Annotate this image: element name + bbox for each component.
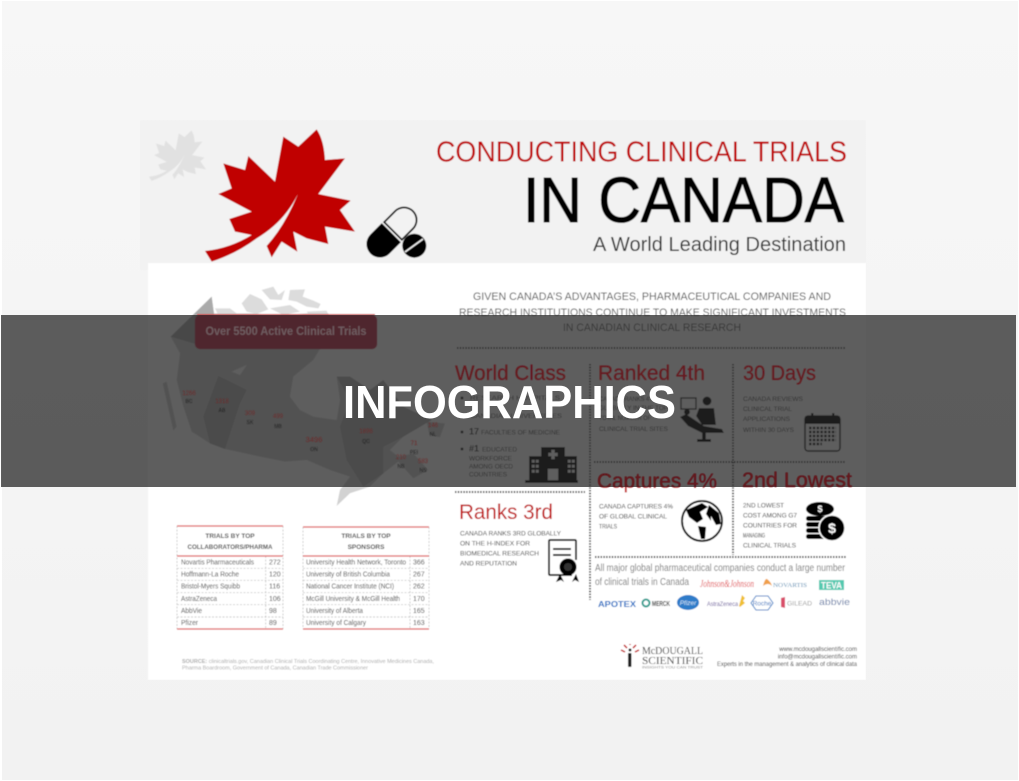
map: Yukon dark area: [171, 297, 217, 347]
heading: Ranked 4th: Ranked 4th: [598, 362, 705, 385]
table: sponsors: SPONSORS: [348, 544, 385, 551]
logo: Novartis: [763, 579, 807, 589]
logo: Roche: [751, 596, 773, 610]
panel: Ranks 3rd: BIOMEDICAL RESEARCH: [460, 550, 539, 558]
map: arctic islands: [215, 287, 328, 316]
table: collaborators: 89: [269, 620, 277, 627]
panel: Ranked 4th: [599, 396, 724, 442]
table: collaborators: 98: [269, 608, 277, 615]
panel: Ranked 4th: TOTAL NUMBER OF: [599, 415, 651, 422]
panel: 30 Days: CANADA REVIEWS: [743, 396, 803, 403]
table: collaborators: AbbVie: [181, 608, 202, 615]
map labels: 146: [428, 423, 439, 429]
intro text: [459, 291, 846, 334]
table: sponsors: 262: [413, 584, 425, 590]
icon: pills: [361, 202, 426, 263]
badge top edge: [197, 314, 375, 316]
headings crossing the band edge: Captures 4%: [597, 470, 717, 493]
logo: Merck: MERCK: [652, 601, 670, 608]
map: Vancouver Island: [163, 382, 177, 431]
contact details: www.mcdougallscientific.com: [778, 647, 857, 653]
map labels: 499: [273, 414, 284, 420]
panel: Captures 4%: [597, 470, 722, 541]
panel: 2nd Lowest: COUNTRIES FOR: [743, 522, 797, 530]
logo: Novartis: NOVARTIS: [773, 582, 807, 589]
panel: Ranked 4th: CANADA RANKS 4TH: [599, 396, 657, 403]
table: sponsors: University Health Network, Toronto: [306, 560, 406, 566]
table: collaborators: Hoffmann-La Roche: [181, 572, 239, 578]
panel: Ranks 3rd: CANADA RANKS 3RD GLOBALLY: [460, 530, 562, 538]
table: sponsors: 170: [413, 596, 425, 603]
panel: Ranked 4th: CLINICAL TRIAL SITES: [599, 426, 668, 433]
panel: Ranks 3rd: ON THE H-INDEX FOR: [460, 540, 530, 548]
table: collaborators: [177, 526, 283, 629]
map labels: PEI: [410, 450, 418, 456]
logo: AstraZeneca: AstraZeneca: [707, 601, 738, 608]
intro text: RESEARCH INSTITUTIONS CONTINUE TO MAKE SIGNIFICANT INVESTMENTS: [459, 307, 846, 319]
panel: 2nd Lowest: CLINICAL TRIALS: [743, 542, 796, 550]
table: sponsors: University of British Columbia: [306, 572, 390, 578]
panel: pharmaceutical companies: All major global pharmaceutical companies conduct a large number: [595, 563, 846, 574]
logo: Teva: TEVA: [821, 580, 842, 590]
panel: Captures 4%: TRIALS: [599, 524, 617, 530]
logo: McDougall Scientific: [621, 644, 704, 670]
map labels: 583: [418, 459, 429, 465]
logo: McDougall Scientific: INSIGHTS YOU CAN TRUST: [642, 666, 704, 670]
overlay band: [1, 315, 1016, 487]
map of Canada: [163, 287, 445, 506]
table: collaborators: Bristol-Myers Squibb: [181, 584, 240, 590]
table: collaborators: 272: [269, 560, 281, 566]
heading: World Class: World Class: [455, 362, 566, 385]
logo: Gilead: [781, 597, 812, 608]
table: collaborators: Novartis Pharmaceuticals: [181, 560, 254, 566]
map labels: AB: [219, 408, 226, 414]
panel: 30 Days: [743, 396, 840, 451]
table: sponsors: 267: [413, 572, 425, 578]
icon: hospital: [525, 447, 578, 483]
logo: AstraZeneca: [707, 595, 745, 608]
map labels: NL: [430, 432, 436, 438]
logo: Roche: Roche: [753, 600, 772, 608]
title: [436, 136, 847, 256]
infographic poster: [140, 120, 866, 680]
panel: pharmaceutical companies: of clinical trials in Canada: [595, 577, 689, 588]
logo: Merck: [642, 600, 670, 608]
source note: SOURCE: clinicaltrials.gov, Canadian Clinical Trials Coordinating Centre, Innovative Medicines Canada,: [182, 659, 434, 665]
panel: World Class: RESEARCH HOSPITALS: [470, 395, 560, 402]
map labels: 210: [396, 455, 407, 461]
contact details: Experts in the management & analytics of clinical data: [717, 662, 858, 668]
title: A World Leading Destination: [593, 234, 846, 256]
intro text: IN CANADIAN CLINICAL RESEARCH: [563, 322, 741, 334]
map: Alberta: [203, 376, 247, 449]
panel: World Class: WORKFORCE: [469, 456, 512, 462]
map labels: 3496: [306, 435, 322, 444]
logo: Pfizer: Pfizer: [680, 600, 697, 607]
heading: 30 Days: 30 Days: [743, 362, 816, 385]
table: sponsors: McGill University & McGill Health: [306, 596, 400, 603]
panel: Captures 4%: CANADA CAPTURES 4%: [599, 504, 673, 510]
map labels: SK: [247, 420, 254, 426]
table: collaborators: AstraZeneca: [181, 596, 217, 603]
map labels: 309: [245, 411, 256, 417]
panel: Captures 4%: OF GLOBAL CLINICAL: [599, 514, 667, 520]
table: sponsors: National Cancer Institute (NCI): [306, 584, 394, 590]
badge: active clinical trials: Over 5500 Active Clinical Trials: [206, 324, 367, 338]
overlay heading: INFOGRAPHICS: [343, 376, 676, 428]
panel: Ranks 3rd: AND REPUTATION: [460, 560, 517, 568]
panel: 2nd Lowest: 2nd Lowest: [742, 469, 852, 492]
panel: Ranks 3rd: Ranks 3rd: [459, 501, 553, 524]
map labels: 1266: [182, 391, 196, 397]
panel: World Class: COUNTRIES: [469, 472, 507, 478]
icon: calendar: [805, 413, 840, 451]
table: sponsors: TRIALS BY TOP: [341, 533, 391, 540]
map labels: 1896: [359, 429, 373, 435]
title: CONDUCTING CLINICAL TRIALS: [436, 136, 847, 168]
logo: McDougall Scientific: McDOUGALL: [642, 645, 703, 657]
map labels: MB: [274, 424, 282, 430]
logo: McDougall Scientific: SCIENTIFIC: [642, 655, 703, 667]
table: collaborators: 120: [269, 572, 281, 578]
table: sponsors: 165: [413, 608, 425, 615]
contact details: info@mcdougallscientific.com: [778, 654, 857, 660]
panel: 30 Days: WITHIN 30 DAYS: [743, 427, 794, 434]
icon: patient in clinical chair: [680, 396, 724, 442]
intro text: GIVEN CANADA’S ADVANTAGES, PHARMACEUTICAL COMPANIES AND: [473, 291, 831, 303]
source note: Pharma Boardroom, Government of Canada, Canadian Trade Commissioner: [182, 666, 368, 672]
map labels: QC: [362, 439, 370, 445]
panel: World Class: #1: [469, 444, 479, 454]
panel: 2nd Lowest: [742, 469, 852, 550]
map: lake: [232, 365, 247, 375]
headings crossing the band edge: 2nd Lowest: [742, 469, 852, 492]
title: IN CANADA: [523, 164, 844, 236]
headings crossing the band edge: [598, 471, 852, 488]
poster header band: [140, 120, 866, 270]
icon: coin stack: $: [817, 504, 823, 514]
panel: 2nd Lowest: COST AMONG G7: [743, 512, 797, 520]
map: Quebec: [337, 377, 432, 487]
table: collaborators: 116: [269, 584, 280, 590]
icon: certificate: [549, 540, 579, 582]
panel: World Class: 17: [469, 426, 479, 436]
table: sponsors: 163: [413, 620, 425, 627]
panel: 2nd Lowest: MANAGING: [743, 532, 765, 540]
map: mainland: [171, 297, 432, 506]
map labels: 1318: [215, 399, 229, 405]
map labels: NS: [420, 468, 427, 474]
map labels: BC: [186, 399, 193, 405]
logo: AbbVie: abbvie: [819, 597, 850, 607]
panel: World Class: EDUCATED: [482, 446, 517, 454]
dimmed content seen through the band: [182, 315, 852, 493]
table: collaborators: Pfizer: [181, 620, 199, 627]
panel: 30 Days: APPLICATIONS: [743, 416, 790, 423]
map: Newfoundland: [427, 422, 445, 437]
table: collaborators: COLLABORATORS/PHARMA: [188, 544, 273, 551]
panel: World Class: CANADIAN UNIVERSITIES: [470, 413, 562, 420]
icon: coin stack: $: [828, 520, 836, 536]
table: sponsors: [303, 527, 429, 629]
table: collaborators: 106: [269, 596, 281, 603]
icon: globe: [682, 501, 722, 541]
badge: active clinical trials: [195, 315, 377, 349]
poster white panel: [148, 263, 866, 680]
map labels: NB: [398, 464, 405, 470]
source note: [182, 659, 434, 672]
logo: Apotex: APOTEX: [598, 599, 636, 609]
panel: World Class: [460, 395, 578, 483]
panel: 2nd Lowest: 2ND LOWEST: [743, 502, 784, 510]
map labels: ON: [310, 447, 318, 453]
table: collaborators: TRIALS BY TOP: [205, 533, 255, 540]
map labels: [182, 391, 439, 474]
panel: Captures 4%: Captures 4%: [597, 470, 717, 493]
map labels: 71: [411, 441, 418, 447]
table: sponsors: University of Calgary: [306, 620, 366, 627]
panel: Ranked 4th: GLOBALLY IN THE TOP: [599, 405, 668, 412]
icon: red maple leaf: [205, 129, 355, 262]
table: sponsors: University of Alberta: [306, 608, 363, 615]
panel: 30 Days: CLINICAL TRIAL: [743, 406, 792, 413]
icon: faded maple leaf: [149, 131, 206, 181]
panel: Ranks 3rd: [459, 501, 579, 582]
panel: pharmaceutical companies: [595, 563, 850, 610]
contact details: [717, 647, 858, 668]
panel: World Class: FACULTIES OF MEDICINE: [481, 430, 560, 436]
panel: World Class: AMONG OECD: [469, 464, 513, 470]
logo: Johnson and Johnson: Johnson&Johnson: [700, 578, 754, 590]
logo: Pfizer: [677, 595, 699, 610]
logo: Gilead: GILEAD: [787, 600, 812, 608]
icon: coin stack: [806, 502, 845, 541]
table: sponsors: 366: [413, 560, 425, 566]
